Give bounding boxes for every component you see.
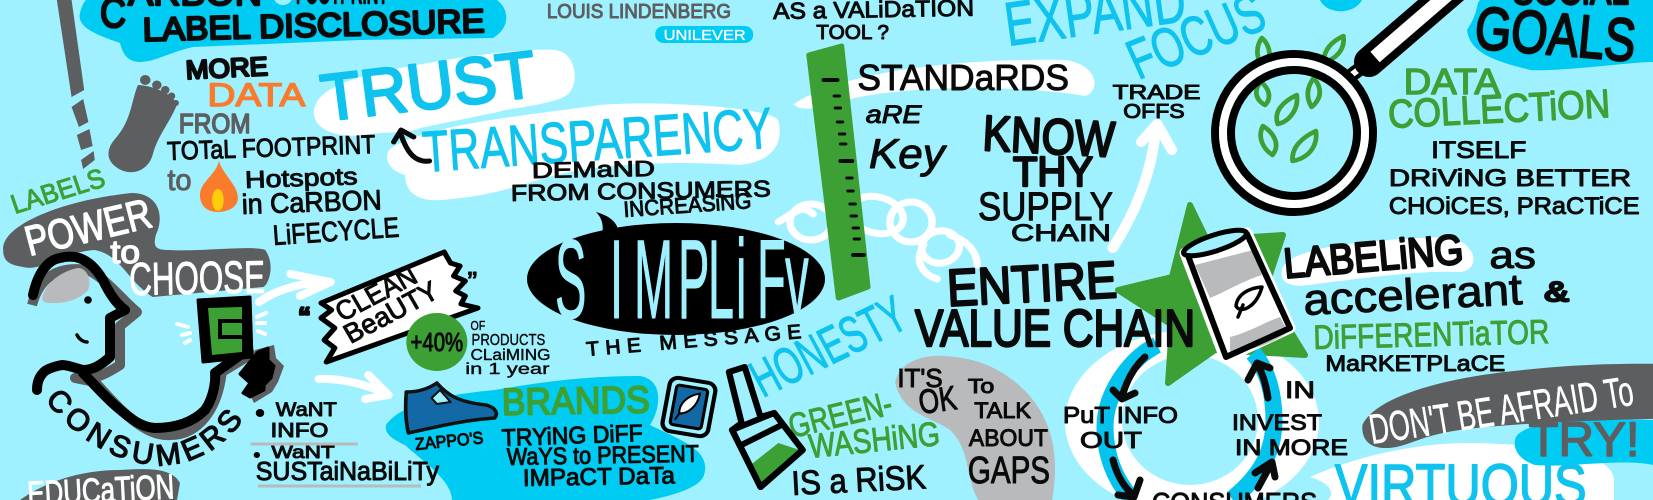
text: thy: THY xyxy=(1013,148,1093,195)
text: impact data: IMPaCT DaTa xyxy=(523,462,676,492)
text: info: INFO xyxy=(271,419,328,442)
loop arrows xyxy=(1113,357,1275,497)
text: total footprint: TOTaL FOOTPRINT xyxy=(167,130,376,166)
lens inner ring xyxy=(1231,70,1357,196)
text: out: OUT xyxy=(1080,427,1142,453)
text: ok: OK xyxy=(916,379,959,422)
white dot at top edge xyxy=(273,0,293,5)
flame core xyxy=(212,189,224,211)
text: from consumers: FROM CONSUMERS xyxy=(511,175,771,206)
text: consumers on curve: CONSUMERS xyxy=(48,390,241,466)
right column upper xyxy=(1113,0,1344,248)
text: differentiator: DiFFERENTiaTOR xyxy=(1313,313,1550,357)
stat: +40% xyxy=(406,313,551,378)
text: entire value chain xyxy=(915,251,1195,358)
text: choose: CHOOSE xyxy=(129,252,265,306)
ruler xyxy=(809,46,868,298)
text: lifecycle: LiFECYCLE xyxy=(272,212,400,252)
text: data: DATA xyxy=(1404,61,1500,102)
icon: flame xyxy=(200,161,238,212)
text: to: to xyxy=(111,234,140,270)
hand xyxy=(240,348,274,397)
arrow: to brands xyxy=(319,375,388,399)
divider two xyxy=(258,484,421,488)
text: as: as xyxy=(1489,235,1536,277)
text: entire value chain: ENTIRE xyxy=(946,251,1118,318)
leaves xyxy=(1256,36,1344,161)
right column text xyxy=(1387,0,1640,220)
neck highlight xyxy=(1350,67,1362,76)
text: try: TRY! xyxy=(1528,413,1640,467)
text block: brands xyxy=(501,379,699,492)
white chain illustration xyxy=(778,191,977,279)
text: chain: CHAIN xyxy=(1011,220,1111,247)
text: hotspots: Hotspots xyxy=(245,164,358,194)
text: standards: STANDaRDS xyxy=(857,58,1069,98)
can rim xyxy=(1181,225,1249,261)
left column lower xyxy=(3,193,551,454)
text: labels: LABELS xyxy=(7,162,109,220)
text: driving better: DRiViNG BETTER xyxy=(1389,166,1631,192)
text: labeling: LABELiNG xyxy=(1282,226,1465,288)
text: marketplace: MaRKETPLaCE xyxy=(1325,352,1505,376)
brush outline xyxy=(732,413,803,487)
text: +40%: +40% xyxy=(411,328,463,357)
bullet: want info xyxy=(256,409,264,417)
text: zappos: ZAPPO'S xyxy=(414,428,484,454)
text: in invest in more: IN xyxy=(1285,377,1315,404)
text block: demand from consumers increasing xyxy=(511,156,771,222)
pill: unilever xyxy=(655,26,753,43)
smile xyxy=(77,335,87,342)
phone screen xyxy=(208,307,242,355)
loop: cyan arcs xyxy=(1105,345,1274,499)
text: more: MORE xyxy=(185,52,269,85)
text: key: Key xyxy=(869,131,947,178)
grey power to choose blob xyxy=(3,193,271,297)
text: accelerant: accelerant xyxy=(1302,264,1524,325)
text: about: ABOUT xyxy=(969,426,1048,452)
text: in more: IN MORE xyxy=(1235,435,1348,460)
text: want two: WaNT xyxy=(272,441,335,462)
right column lower xyxy=(1282,226,1653,500)
text: transparency: TRANSPARENCY xyxy=(420,96,774,185)
text: ampersand: & xyxy=(1544,277,1569,308)
text: closing quote: ” xyxy=(467,267,477,298)
loop: virtuous cycle band xyxy=(1065,330,1319,500)
bullet: want sustainability xyxy=(254,452,260,458)
text: invest: INVEST xyxy=(1232,410,1322,435)
leaf on screen xyxy=(675,390,700,423)
left column: data and footprint xyxy=(108,38,540,252)
phone screen xyxy=(670,385,708,429)
text: of: OF xyxy=(471,318,485,333)
icon: grey footprint xyxy=(108,75,179,172)
text: sustainability: SUSTaiNaBiLiTy xyxy=(256,457,440,486)
text: its: IT'S xyxy=(897,364,943,393)
text: from: FROM xyxy=(179,109,251,140)
text: put info out: PuT INFO xyxy=(1063,402,1178,428)
text block: know thy supply chain xyxy=(978,105,1117,247)
figure: consumer with phone xyxy=(32,257,284,435)
icon: phone with leaf xyxy=(661,377,717,437)
text: green: GREEN- xyxy=(784,385,896,446)
phone body xyxy=(198,297,252,362)
eye xyxy=(84,296,92,304)
icon: star xyxy=(1118,205,1305,383)
hand shadow xyxy=(250,345,284,403)
text: tool: TOOL ? xyxy=(816,21,889,44)
banner: dont be afraid to try xyxy=(1362,364,1653,467)
handle xyxy=(1369,0,1455,62)
can outline xyxy=(1187,234,1290,357)
shoe tongue xyxy=(432,390,451,404)
text: put info out xyxy=(1063,402,1178,453)
ruler ticks xyxy=(824,80,864,255)
can grey bands xyxy=(1195,250,1288,354)
grey blob: ok to talk about gaps xyxy=(895,356,1055,500)
lens outer ring xyxy=(1215,54,1373,212)
text block: brands: BRANDS xyxy=(501,379,650,424)
text: opening quote: “ xyxy=(299,301,310,337)
text: talk: TALK xyxy=(974,399,1031,423)
bubble tail xyxy=(596,212,618,236)
text: gaps: GAPS xyxy=(968,450,1050,492)
speaker credit xyxy=(547,0,753,44)
text: products: PRODUCTS xyxy=(472,331,545,349)
text: trust: TRUST xyxy=(317,38,540,136)
text: to: To xyxy=(968,375,994,398)
banner: education xyxy=(20,467,180,500)
icon: magnifying glass xyxy=(1215,0,1455,212)
text: increasing: INCREASiNG xyxy=(623,188,752,222)
text: value chain: VALUE CHAIN xyxy=(915,300,1195,358)
text: in carbon: in CaRBON xyxy=(241,185,382,221)
text block: demand from consumers increasing: DEMaND xyxy=(532,156,655,183)
brush ferrule band xyxy=(737,425,782,447)
text: clean: CLEAN xyxy=(330,260,422,327)
text: trade: TRADE xyxy=(1113,82,1201,104)
grey dashed road line xyxy=(57,0,95,169)
text: unilever: UNILEVER xyxy=(664,27,746,44)
text: choices practice: CHOiCES, PRaCTiCE xyxy=(1389,194,1640,220)
text: trying diff: TRYiNG DiFF xyxy=(501,420,643,452)
icon: paint brush xyxy=(729,367,803,487)
can leaf xyxy=(1236,287,1262,317)
phone glyph xyxy=(220,321,242,337)
text: supply: SUPPLY xyxy=(978,185,1113,229)
divider one xyxy=(251,442,358,446)
text: power: POWER xyxy=(20,191,157,265)
lens white ring xyxy=(1223,62,1365,204)
arrow: to clean beauty xyxy=(259,274,331,302)
icon: blue shoe xyxy=(406,383,496,433)
icon: tin can with leaf xyxy=(1181,225,1290,358)
handle highlight xyxy=(1375,0,1455,57)
text: the message: THE MESSAGE xyxy=(585,321,802,361)
text: simplify: SIMPLiFy xyxy=(555,218,809,343)
hair xyxy=(42,268,90,303)
brush paint xyxy=(748,443,799,485)
text: itself: ITSELF xyxy=(1431,138,1526,164)
text: beauty: BeaUTY xyxy=(338,275,444,349)
text: honesty: HONESTY xyxy=(741,285,916,408)
left column foreground xyxy=(7,162,440,486)
text: in invest in more xyxy=(1152,377,1348,500)
text: are: aRE xyxy=(866,102,923,129)
text block: know thy supply chain: KNOW xyxy=(981,105,1117,168)
figure shadow xyxy=(32,269,255,435)
text: to: to xyxy=(167,163,192,197)
text: label disclosure: LABEL DISCLOSURE xyxy=(142,2,485,48)
heading: carbon footprint label disclosure xyxy=(100,0,485,48)
text: washing: WASHiNG xyxy=(807,415,942,466)
speaker credit: LOUIS LINDENBERG xyxy=(547,0,731,23)
text: want: WaNT xyxy=(276,399,337,421)
text: offs: OFFS xyxy=(1123,101,1185,123)
white brush backgrounds xyxy=(314,50,1614,500)
middle column xyxy=(585,0,1069,500)
banner: clean beauty xyxy=(299,252,478,362)
head and body outline xyxy=(33,257,243,428)
text: data: DATA xyxy=(207,77,305,113)
arrow: transparency up to trust xyxy=(394,130,429,161)
phone signal marks xyxy=(177,313,266,343)
text: in 1 year: in 1 year xyxy=(465,360,550,378)
text: ways to present: WaYS to PRESENT xyxy=(507,441,699,471)
speech bubble: simplify xyxy=(527,212,825,343)
text: collection: COLLECTiON xyxy=(1387,81,1611,137)
text: claiming: CLaiMING xyxy=(471,346,551,364)
arrow: up to trade offs xyxy=(1113,124,1172,248)
